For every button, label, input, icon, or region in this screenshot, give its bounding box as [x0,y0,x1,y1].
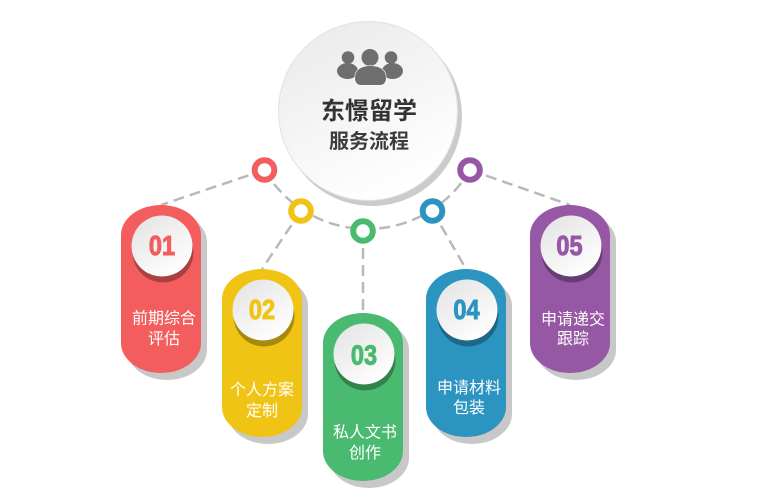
card 02: 定制 [246,402,278,420]
ring: purple [460,160,480,180]
card 04 [426,269,512,444]
card 03: 创作 [349,444,381,462]
ring: yellow [291,201,311,221]
card 02: 02 [249,295,275,325]
card 02 [222,269,308,444]
icon: people [337,49,403,85]
card 03: 私人文书 [333,424,397,442]
card 05: 跟踪 [557,330,589,348]
title: 东憬留学 [321,98,417,125]
card 05 [530,205,616,380]
card 01: 评估 [148,330,180,348]
card 05: 05 [556,231,583,261]
ring: red [255,160,274,180]
subtitle: 服务流程 [329,130,409,153]
dashed connectors [161,170,570,313]
card 04: 04 [453,295,480,325]
ring: blue [423,201,442,221]
card 01: 01 [149,231,175,261]
card 03: 03 [351,341,377,371]
card 03 [323,313,409,488]
ring: green [353,221,373,241]
card 05: 申请递交 [541,310,605,328]
card 04: 包装 [453,399,485,417]
card 01: 前期综合 [132,310,196,328]
card 01 [121,205,207,380]
card 02: 个人方案 [230,381,294,399]
central circle [278,22,462,206]
card 04: 申请材料 [437,379,501,397]
